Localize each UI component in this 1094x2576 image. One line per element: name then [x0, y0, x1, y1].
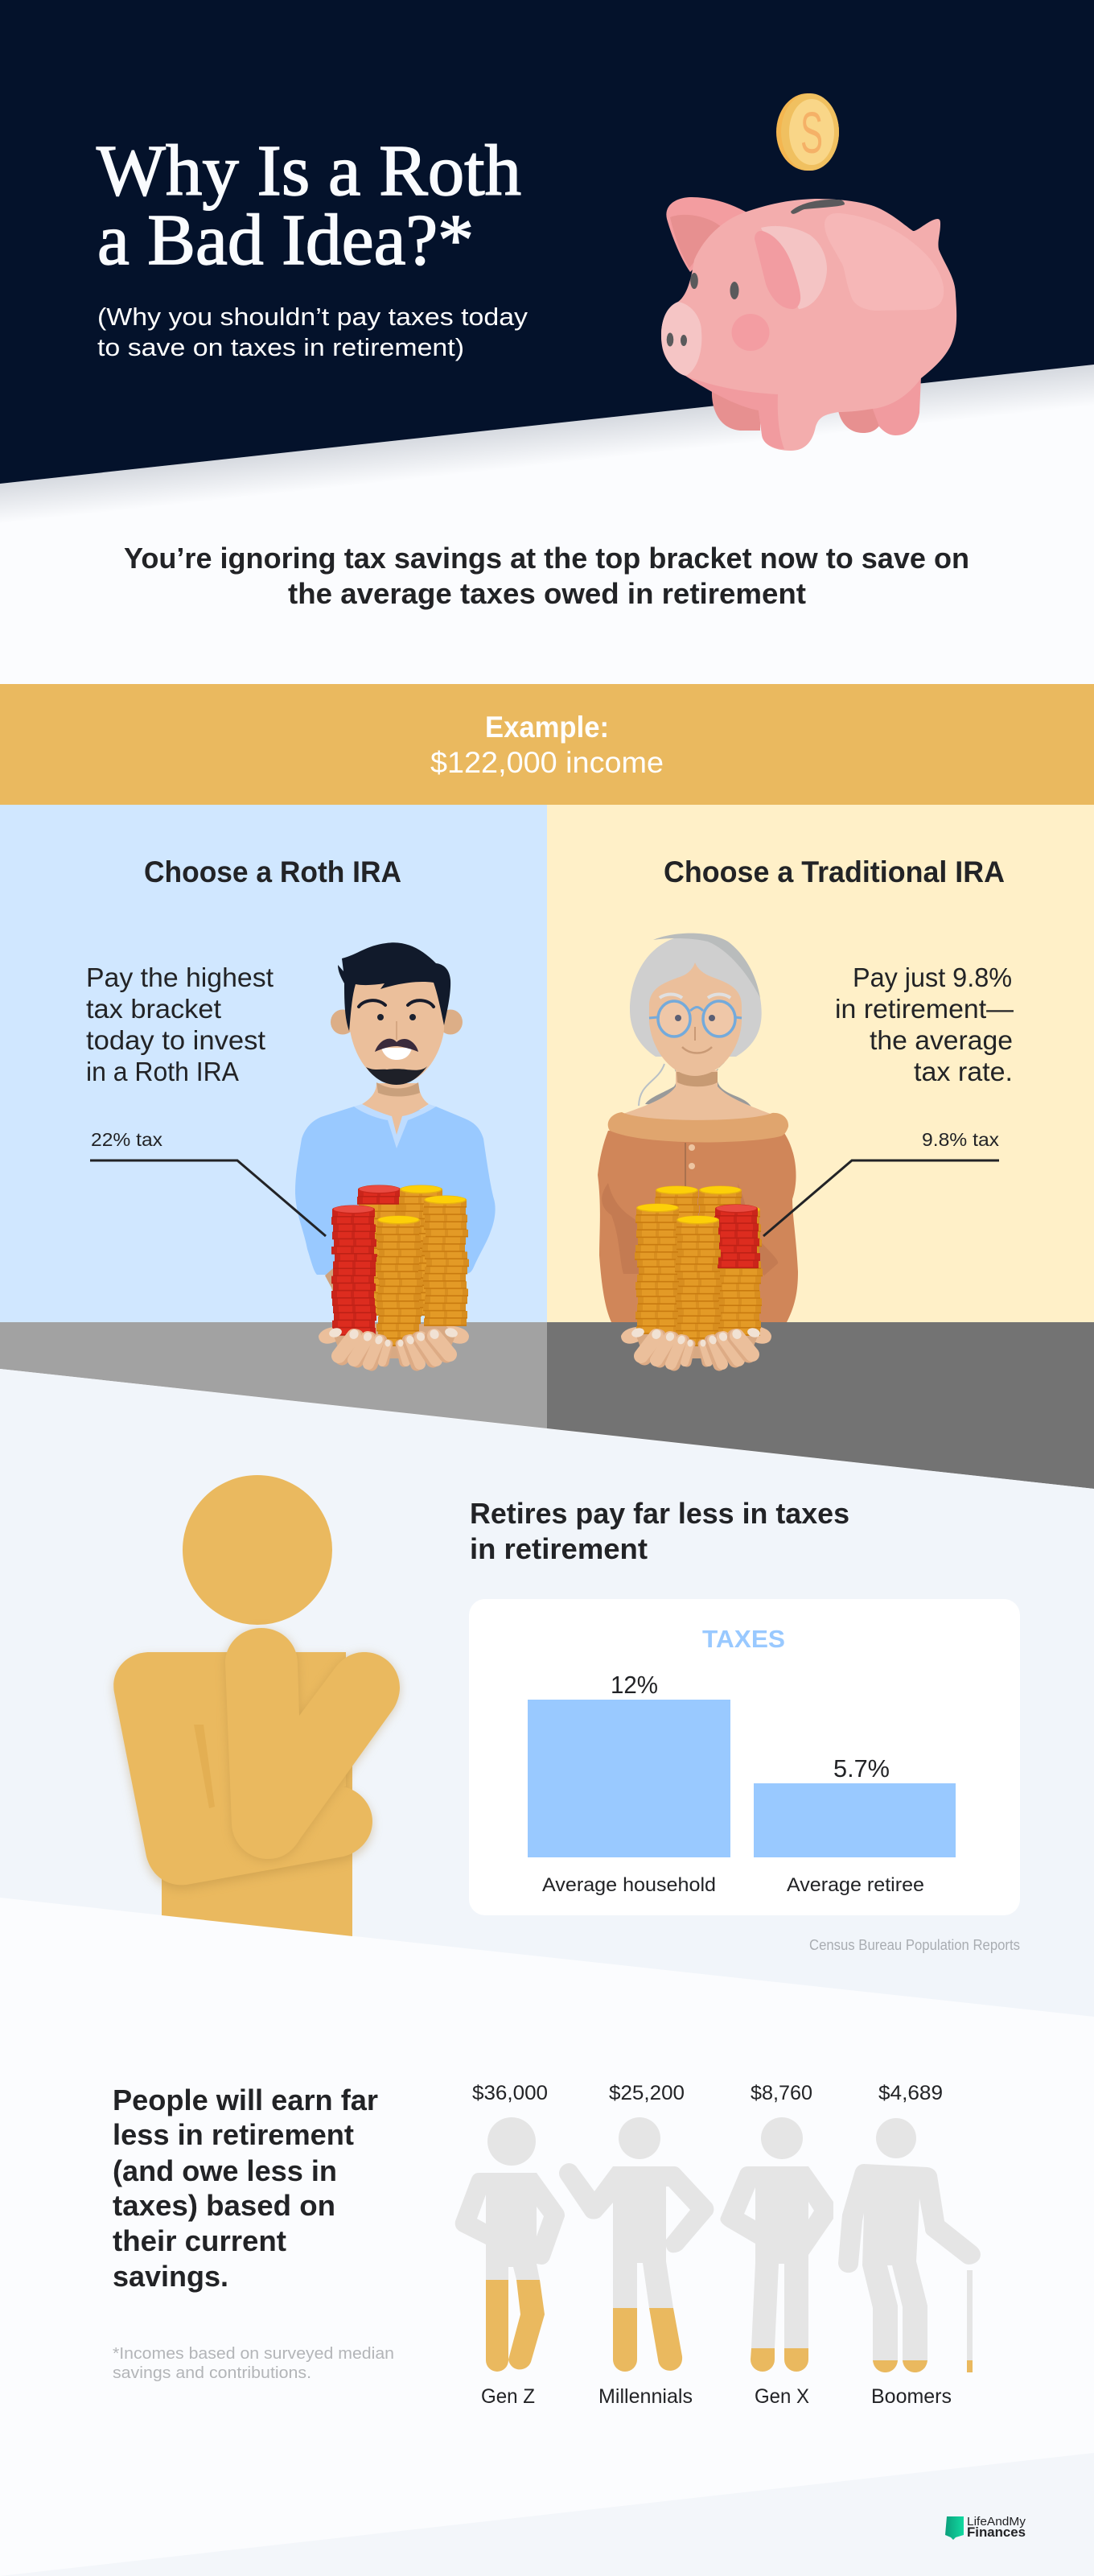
- callout: 22% tax: 22% tax: [91, 1129, 163, 1150]
- example band: Example:: [485, 711, 609, 744]
- footnote: *Incomes based on surveyed median: [113, 2345, 394, 2363]
- figure: Gen X: $8,760: [751, 2082, 812, 2104]
- callout: 9.8% tax: 9.8% tax: [922, 1129, 1000, 1150]
- coin stack: right red and gold: [714, 1204, 763, 1336]
- title: [97, 131, 521, 280]
- cane: [967, 2270, 973, 2372]
- figure: Gen X: [720, 2082, 833, 2408]
- woman skin shoulders: [621, 1070, 772, 1127]
- intro statement: [124, 542, 969, 610]
- panel: Traditional IRA background: [547, 805, 1094, 1322]
- coin stack: left: [635, 1204, 681, 1334]
- table left: [0, 1322, 547, 1428]
- text: earnings statement: [113, 2083, 378, 2293]
- callout: 9.8% tax: [763, 1129, 1000, 1236]
- man face: [350, 982, 444, 1085]
- logo: LifeAndMy: [967, 2515, 1026, 2529]
- person raised forearm: [225, 1628, 400, 1859]
- heading: retirees pay less: Retires pay far less in taxes: [470, 1497, 849, 1530]
- logo: Finances: [967, 2524, 1026, 2540]
- hands back: woman: [621, 1324, 771, 1358]
- woman with coins: [598, 934, 798, 1365]
- figure: Millennials: $25,200: [609, 2082, 685, 2104]
- man shirt: [295, 1107, 496, 1275]
- hands back: man: [319, 1324, 469, 1358]
- coin stack: middle: [376, 1215, 422, 1346]
- text: Traditional explanation: the average: [870, 1025, 1013, 1055]
- coin stack: back 1: [654, 1186, 701, 1317]
- heading: Traditional: Choose a Traditional IRA: [664, 855, 1005, 888]
- thinking person figure: [113, 1475, 400, 1936]
- text: earnings statement: taxes) based on: [113, 2189, 335, 2222]
- source note: Census Bureau Population Reports: [809, 1937, 1020, 1953]
- pig eyes, nostrils and slot: [667, 200, 845, 346]
- woman collar: [608, 1112, 788, 1142]
- man brows and eyes: [359, 1000, 385, 1007]
- pig far left leg: [712, 390, 760, 431]
- bar: average retiree: 5.7%: [833, 1754, 890, 1783]
- woman eyebrows: [660, 995, 730, 998]
- man mouth and moustache: [381, 1048, 412, 1060]
- text: Roth explanation: in a Roth IRA: [86, 1057, 239, 1086]
- subtitle: (Why you shouldn’t pay taxes today: [97, 303, 528, 331]
- text: Traditional explanation: in retirement—: [835, 994, 1014, 1024]
- woman hair back: [630, 934, 762, 1057]
- coin stack: middle: [675, 1215, 722, 1346]
- icon: gold coin: S: [800, 101, 823, 166]
- header shadow: [0, 365, 1094, 525]
- text: earnings statement: savings.: [113, 2260, 228, 2293]
- text: Traditional explanation: tax rate.: [914, 1057, 1013, 1086]
- chart title: TAXES: [702, 1625, 785, 1653]
- figure: Boomers: Boomers: [871, 2385, 952, 2408]
- pig snout: [661, 302, 701, 376]
- coin stack: back left with red top: [356, 1185, 403, 1316]
- person head: [183, 1475, 332, 1625]
- woman sweater: [598, 1131, 798, 1322]
- man collar: [354, 1104, 436, 1148]
- title: a Bad Idea?*: [97, 200, 474, 280]
- pig body: [661, 199, 956, 451]
- icon: gold coin: [776, 93, 839, 171]
- bar: average household: [528, 1671, 730, 1896]
- figure: Boomers: $4,689: [878, 2082, 943, 2104]
- pig near right leg: [869, 377, 921, 435]
- title: Why Is a Roth: [97, 131, 521, 211]
- man ears: [331, 1009, 355, 1035]
- pig jaw and front leg shade: [685, 376, 784, 449]
- man neck: [362, 1083, 429, 1136]
- logo: [945, 2515, 1026, 2540]
- text: Traditional explanation: [835, 962, 1014, 1086]
- woman face: [649, 962, 742, 1076]
- heading: retirees pay less: in retirement: [470, 1532, 648, 1565]
- example band: $122,000 income: [430, 746, 664, 779]
- coin stack: right: [422, 1196, 469, 1326]
- woman glasses: [658, 1001, 735, 1037]
- pig back highlight: [825, 213, 944, 311]
- hands front: man: [328, 1327, 459, 1365]
- coin stack: back right: [398, 1185, 445, 1316]
- bar: average household: 12%: [611, 1671, 658, 1699]
- pig wing: [761, 226, 827, 309]
- text: earnings statement: (and owe less in: [113, 2154, 337, 2187]
- bar: average retiree: Average retiree: [787, 1874, 924, 1896]
- figure: Gen Z: [455, 2082, 565, 2408]
- figure: Boomers: [838, 2082, 981, 2408]
- man forearm: [325, 1268, 341, 1320]
- woman hair strands: [645, 1062, 684, 1107]
- pig far right leg: [838, 402, 880, 433]
- text: earnings statement: less in retirement: [113, 2118, 354, 2151]
- bar: average household: Average household: [542, 1874, 716, 1896]
- panel: taxes bar chart: [469, 1599, 1020, 1915]
- heading: retirees pay less: [470, 1497, 849, 1565]
- icon: piggy bank: [661, 197, 956, 451]
- text: Roth explanation: tax bracket: [86, 994, 221, 1024]
- bottom diagonal: [0, 2453, 1094, 2576]
- panel: Roth IRA background: [0, 805, 547, 1322]
- intro statement: You’re ignoring tax savings at the top bracket now to save on: [124, 542, 969, 575]
- text: Roth explanation: today to invest: [86, 1025, 265, 1055]
- hands front: woman: [631, 1327, 761, 1365]
- figure: Millennials: Millennials: [598, 2385, 693, 2408]
- woman eyes and smile: [675, 1015, 681, 1021]
- text: Roth explanation: Pay the highest: [86, 962, 274, 992]
- person folded arm: [113, 1652, 372, 1885]
- man with coins: [295, 942, 496, 1365]
- heading: Roth: Choose a Roth IRA: [144, 855, 401, 888]
- figure: Gen Z: Gen Z: [481, 2385, 535, 2408]
- coin stack: red front: [331, 1206, 377, 1336]
- callout: 22% tax: [90, 1129, 326, 1236]
- woman buttons: [689, 1144, 695, 1169]
- person arm crease: [194, 1725, 215, 1808]
- coin stack: back 2: [697, 1186, 744, 1317]
- header dark band: [0, 0, 1094, 484]
- text: Traditional explanation: Pay just 9.8%: [853, 962, 1012, 992]
- pig ear: [666, 197, 750, 272]
- figure: Gen X: Gen X: [755, 2385, 809, 2408]
- next section background: [0, 1369, 1094, 2017]
- text: Roth explanation: [86, 962, 274, 1086]
- intro statement: the average taxes owed in retirement: [288, 577, 806, 610]
- person torso: [162, 1690, 352, 1936]
- pig cheek: [732, 314, 769, 351]
- man beard: [366, 1066, 427, 1085]
- example band: [0, 684, 1094, 806]
- footnote: [113, 2345, 394, 2382]
- footnote: savings and contributions.: [113, 2364, 311, 2382]
- bar: average retiree: [754, 1754, 956, 1896]
- table right: [547, 1322, 1094, 1489]
- subtitle: [97, 303, 528, 361]
- figure: Gen Z: $36,000: [472, 2082, 548, 2104]
- text: earnings statement: their current: [113, 2224, 286, 2257]
- text: earnings statement: People will earn far: [113, 2083, 378, 2116]
- subtitle: to save on taxes in retirement): [97, 333, 464, 361]
- figure: Millennials: [559, 2082, 714, 2408]
- man hair: [338, 942, 450, 1031]
